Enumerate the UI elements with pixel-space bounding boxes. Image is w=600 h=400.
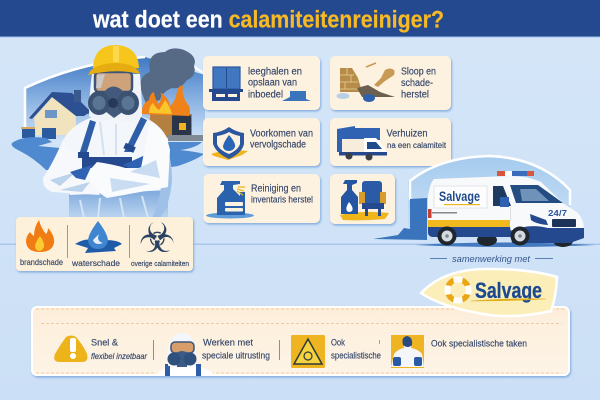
text: schade- bbox=[401, 78, 433, 89]
text: Salvage: Salvage bbox=[475, 278, 542, 303]
text: herstel bbox=[401, 90, 429, 100]
icon: protective suit bbox=[391, 335, 424, 368]
badge: Salvage logo bbox=[421, 269, 557, 316]
icon: cabinet bbox=[209, 67, 243, 101]
24/7: 24/7 bbox=[548, 209, 568, 218]
text: inventaris herstel bbox=[251, 194, 313, 204]
text: vervolgschade bbox=[250, 140, 306, 150]
label: brandschade: brandschade bbox=[20, 257, 63, 267]
straps bbox=[78, 120, 96, 158]
icon: moving truck bbox=[337, 126, 387, 160]
text: ook specialistische: Ook bbox=[331, 338, 345, 348]
text: Sloop en bbox=[401, 66, 436, 78]
glove right bbox=[123, 152, 155, 168]
icon: biohazard: ☣ bbox=[139, 214, 175, 262]
card: verhuizen bbox=[330, 118, 451, 166]
text: opslaan van bbox=[248, 78, 297, 88]
icon: fire bbox=[26, 220, 54, 252]
card: inventory cleaning icon bbox=[330, 174, 395, 224]
illustration: arch behind van bbox=[373, 156, 596, 247]
text: Verhuizen bbox=[386, 128, 428, 140]
roof lightbar bbox=[497, 171, 534, 176]
card: leeghalen en opslaan bbox=[203, 56, 320, 110]
text: werken met: Werken met bbox=[203, 338, 253, 348]
text: leeghalen en bbox=[248, 66, 302, 78]
illustration: worker with respirator bbox=[43, 45, 172, 218]
icon: shield with drop bbox=[211, 127, 248, 160]
icon: hazard sign bbox=[291, 335, 325, 368]
partnership label: samenwerking met bbox=[452, 254, 531, 264]
icon: warning bbox=[54, 336, 87, 362]
hood bbox=[89, 74, 142, 122]
text: ook specialistische: specialistische bbox=[331, 350, 381, 362]
label: waterschade: waterschade bbox=[71, 258, 120, 268]
text: werken met: speciale uitrusting bbox=[202, 350, 270, 362]
icon: small furniture bbox=[282, 91, 311, 101]
text: ook specialistische taken: Ook specialistische taken bbox=[431, 338, 527, 350]
icon: smoke bbox=[140, 48, 195, 104]
text: Voorkomen van bbox=[250, 128, 313, 140]
label: overige calamiteiten: overige calamiteiten bbox=[131, 261, 189, 268]
card: voorkomen van vervolgschade bbox=[203, 118, 320, 166]
partnership label bbox=[430, 254, 553, 264]
card: verhuizen: na een calamiteit bbox=[387, 141, 447, 150]
headlight & grille bbox=[530, 214, 548, 225]
right arm bbox=[87, 122, 170, 198]
suit torso bbox=[55, 116, 170, 195]
icon: mini worker bbox=[153, 333, 217, 376]
illustration: Salvage van bbox=[428, 171, 584, 247]
icon: water drop bbox=[75, 221, 122, 253]
window bbox=[510, 185, 563, 203]
icon: cleaner and chair bbox=[340, 180, 389, 220]
text: Reiniging en bbox=[251, 184, 301, 194]
panel: damage types bbox=[16, 214, 193, 271]
water bbox=[12, 137, 60, 170]
panel: bottom strip bbox=[32, 307, 569, 376]
lower torso bbox=[69, 190, 168, 218]
text: snel en flexibel: Snel & bbox=[91, 338, 119, 348]
glove left bbox=[70, 165, 92, 180]
icon: house bbox=[21, 90, 92, 139]
icon: burning house bbox=[142, 86, 203, 141]
card: sloop en schadeherstel bbox=[330, 56, 451, 110]
far wheels bbox=[477, 234, 497, 246]
helmet bbox=[88, 45, 140, 75]
icon: lifebuoy bbox=[444, 276, 472, 304]
face & respirator mask bbox=[88, 72, 139, 118]
body bbox=[428, 176, 584, 236]
illustration: disaster scene behind worker bbox=[12, 48, 205, 170]
icon: spray bottle bbox=[206, 181, 254, 218]
card: reiniging en inventaris herstel bbox=[204, 174, 320, 223]
icon: broken wall and debris bbox=[336, 63, 395, 102]
front wheels bbox=[438, 226, 456, 246]
logo text on van: Salvage bbox=[439, 188, 480, 204]
title: wat doet een calamiteitenreiniger? bbox=[92, 6, 444, 34]
text: inboedel bbox=[248, 90, 283, 100]
text: snel en flexibel: flexibel inzetbaar bbox=[91, 352, 147, 361]
left arm bbox=[43, 140, 100, 195]
header banner bbox=[0, 0, 600, 37]
